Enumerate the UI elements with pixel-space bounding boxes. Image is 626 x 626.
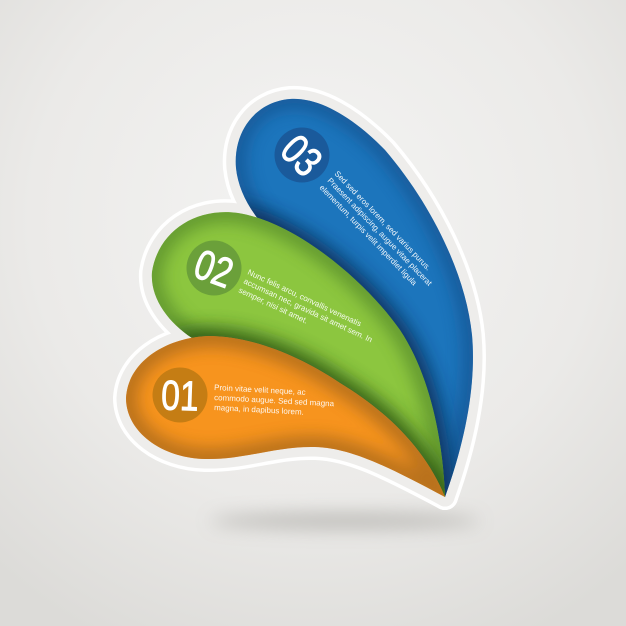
panel 02: green petal bbox=[126, 212, 445, 497]
panel 02: green petal: accumsan nec, gravida sit amet sem. In bbox=[242, 277, 374, 344]
badge 01: 01 bbox=[160, 373, 199, 421]
ground shadow bbox=[210, 513, 480, 529]
panel 03: blue petal: elementum, turpis velit imperdiet ligula bbox=[318, 183, 419, 288]
text 02: Nunc felis arcu, convallis venenatis bbox=[246, 268, 363, 328]
panel 01: orange petal bbox=[126, 336, 445, 497]
panel 01: orange petal: magna, in dapibus lorem. bbox=[214, 403, 304, 417]
panel 02: green petal: semper, nisi sit amet. bbox=[237, 286, 309, 326]
text 03: Sed sed eros lorem, sed varius purus. bbox=[333, 169, 433, 272]
white outline sticker bbox=[126, 99, 473, 497]
text 01: Proin vitae velit neque, ac bbox=[214, 383, 306, 397]
badge 02: 02 bbox=[188, 241, 239, 298]
panel 03: blue petal: Praesent adipiscing, augue vitae placerat bbox=[326, 176, 434, 288]
badge 01 bbox=[152, 368, 208, 422]
panel 01: orange petal: commodo augue. Sed sed magna bbox=[214, 393, 335, 408]
panel 03: blue petal bbox=[236, 98, 473, 497]
badge 03: 03 bbox=[271, 127, 330, 186]
